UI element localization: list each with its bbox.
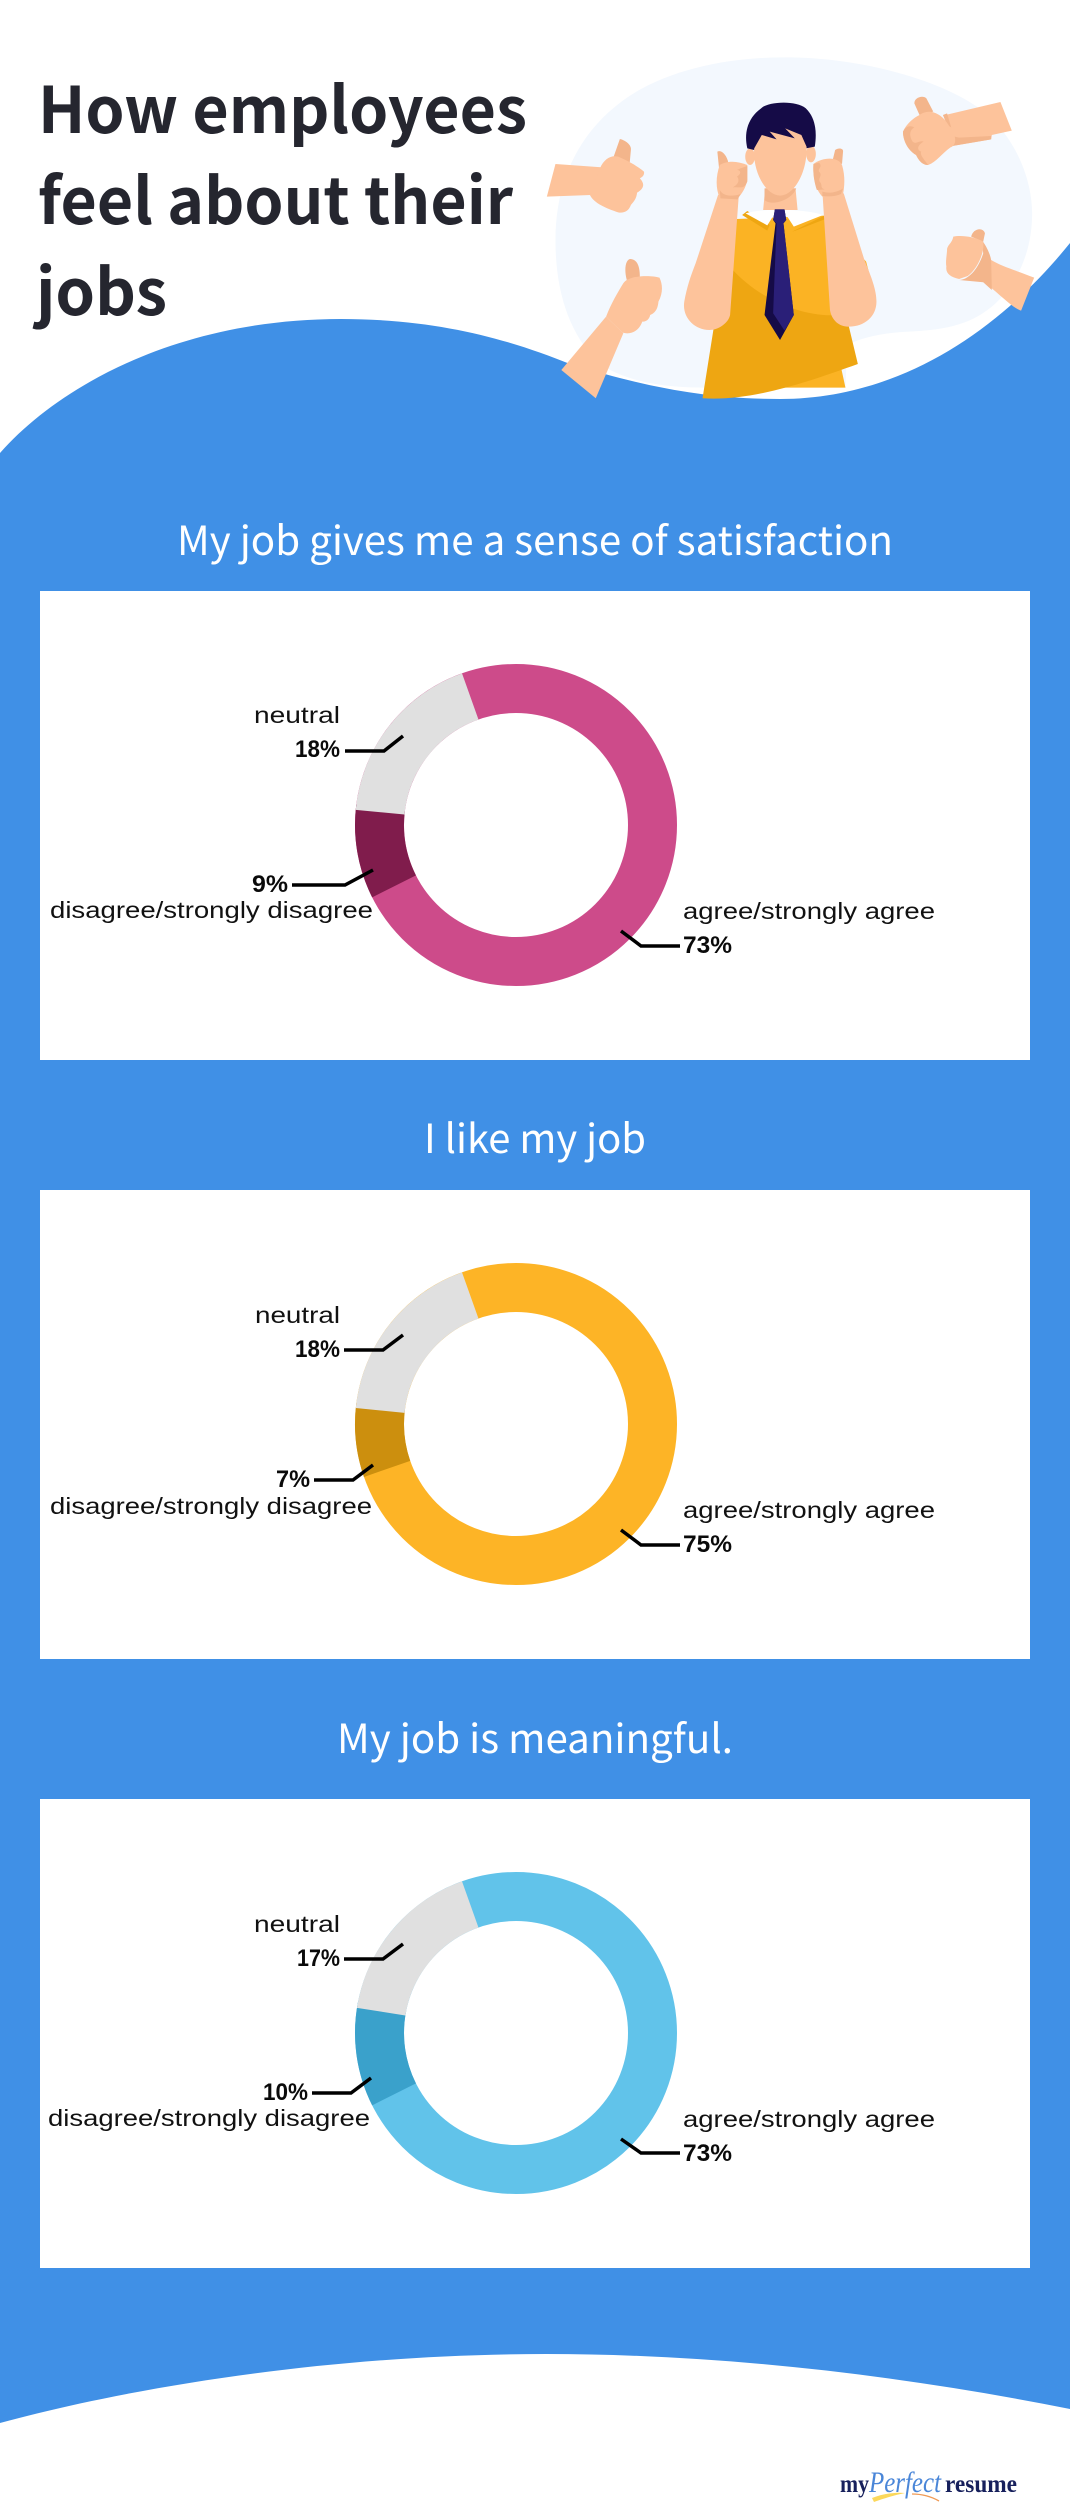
- icon: thumbs-up hand, upper left: [547, 139, 644, 213]
- label: disagree 10%: 10%: [263, 2079, 308, 2106]
- label: neutral 17%: [254, 1911, 403, 1972]
- icon: thumbs-up hand, lower left: [561, 259, 662, 398]
- figure: employee: [684, 103, 876, 399]
- label: neutral 18%: [255, 1302, 403, 1363]
- label: neutral 17%: 17%: [297, 1945, 340, 1972]
- label: agree 75%: [621, 1497, 935, 1558]
- label: agree 75%: agree/strongly agree: [683, 1497, 935, 1523]
- label: agree 73%: agree/strongly agree: [683, 2106, 935, 2132]
- title: [32, 60, 527, 334]
- heading: satisfaction: My job gives me a sense of satisfaction: [177, 509, 893, 567]
- title: How employees: [38, 60, 527, 152]
- arms and raised fists: [684, 148, 876, 330]
- label: neutral 18%: 18%: [295, 1336, 340, 1363]
- panel: satisfaction: [40, 591, 1030, 1060]
- label: agree 73%: 73%: [683, 2140, 732, 2167]
- label: agree 73%: [621, 898, 935, 959]
- label: disagree 9%: 9%: [252, 871, 288, 898]
- shirt: [685, 210, 875, 399]
- donut chart: satisfaction: [333, 642, 699, 1008]
- label: neutral 18%: 18%: [295, 736, 340, 763]
- label: agree 73%: 73%: [683, 932, 732, 959]
- icon: thumbs-up hand, right: [946, 229, 1034, 311]
- label: disagree 7%: 7%: [276, 1466, 310, 1493]
- label: disagree 9%: [50, 870, 373, 923]
- logo: myPerfectResume: Perfect: [868, 2466, 942, 2499]
- illustration: employee with thumbs up surrounded by hands: [547, 97, 1034, 399]
- label: disagree 10%: [48, 2078, 371, 2131]
- label: agree 73%: [621, 2106, 935, 2167]
- label: disagree 7%: disagree/strongly disagree: [50, 1493, 372, 1519]
- donut chart: like my job: [342, 1250, 690, 1598]
- head: [745, 103, 816, 196]
- label: neutral 18%: [254, 702, 403, 763]
- title: feel about their: [38, 151, 513, 243]
- label: disagree 7%: [50, 1465, 373, 1519]
- label: neutral 18%: neutral: [255, 1302, 340, 1328]
- tie: [765, 209, 794, 340]
- label: agree 73%: agree/strongly agree: [683, 898, 935, 924]
- illustration backdrop blob: [555, 57, 1032, 388]
- label: neutral 18%: neutral: [254, 702, 340, 728]
- heading: meaningful: My job is meaningful.: [337, 1707, 733, 1765]
- title: jobs: [32, 242, 167, 334]
- panel: like my job: [40, 1190, 1030, 1659]
- donut chart: meaningful: [333, 1850, 699, 2216]
- logo: myPerfectResume: [840, 2466, 1017, 2502]
- heading: like my job: I like my job: [424, 1107, 646, 1165]
- label: agree 75%: 75%: [683, 1531, 732, 1558]
- label: disagree 10%: disagree/strongly disagree: [48, 2105, 370, 2131]
- icon: thumbs-up hand, upper right: [903, 97, 1012, 165]
- label: disagree 9%: disagree/strongly disagree: [50, 897, 373, 923]
- logo: myPerfectResume: my: [840, 2471, 869, 2498]
- panel: meaningful: [40, 1799, 1030, 2268]
- label: neutral 17%: neutral: [254, 1911, 340, 1937]
- logo: myPerfectResume: resume: [945, 2471, 1017, 2498]
- neck: [763, 188, 798, 210]
